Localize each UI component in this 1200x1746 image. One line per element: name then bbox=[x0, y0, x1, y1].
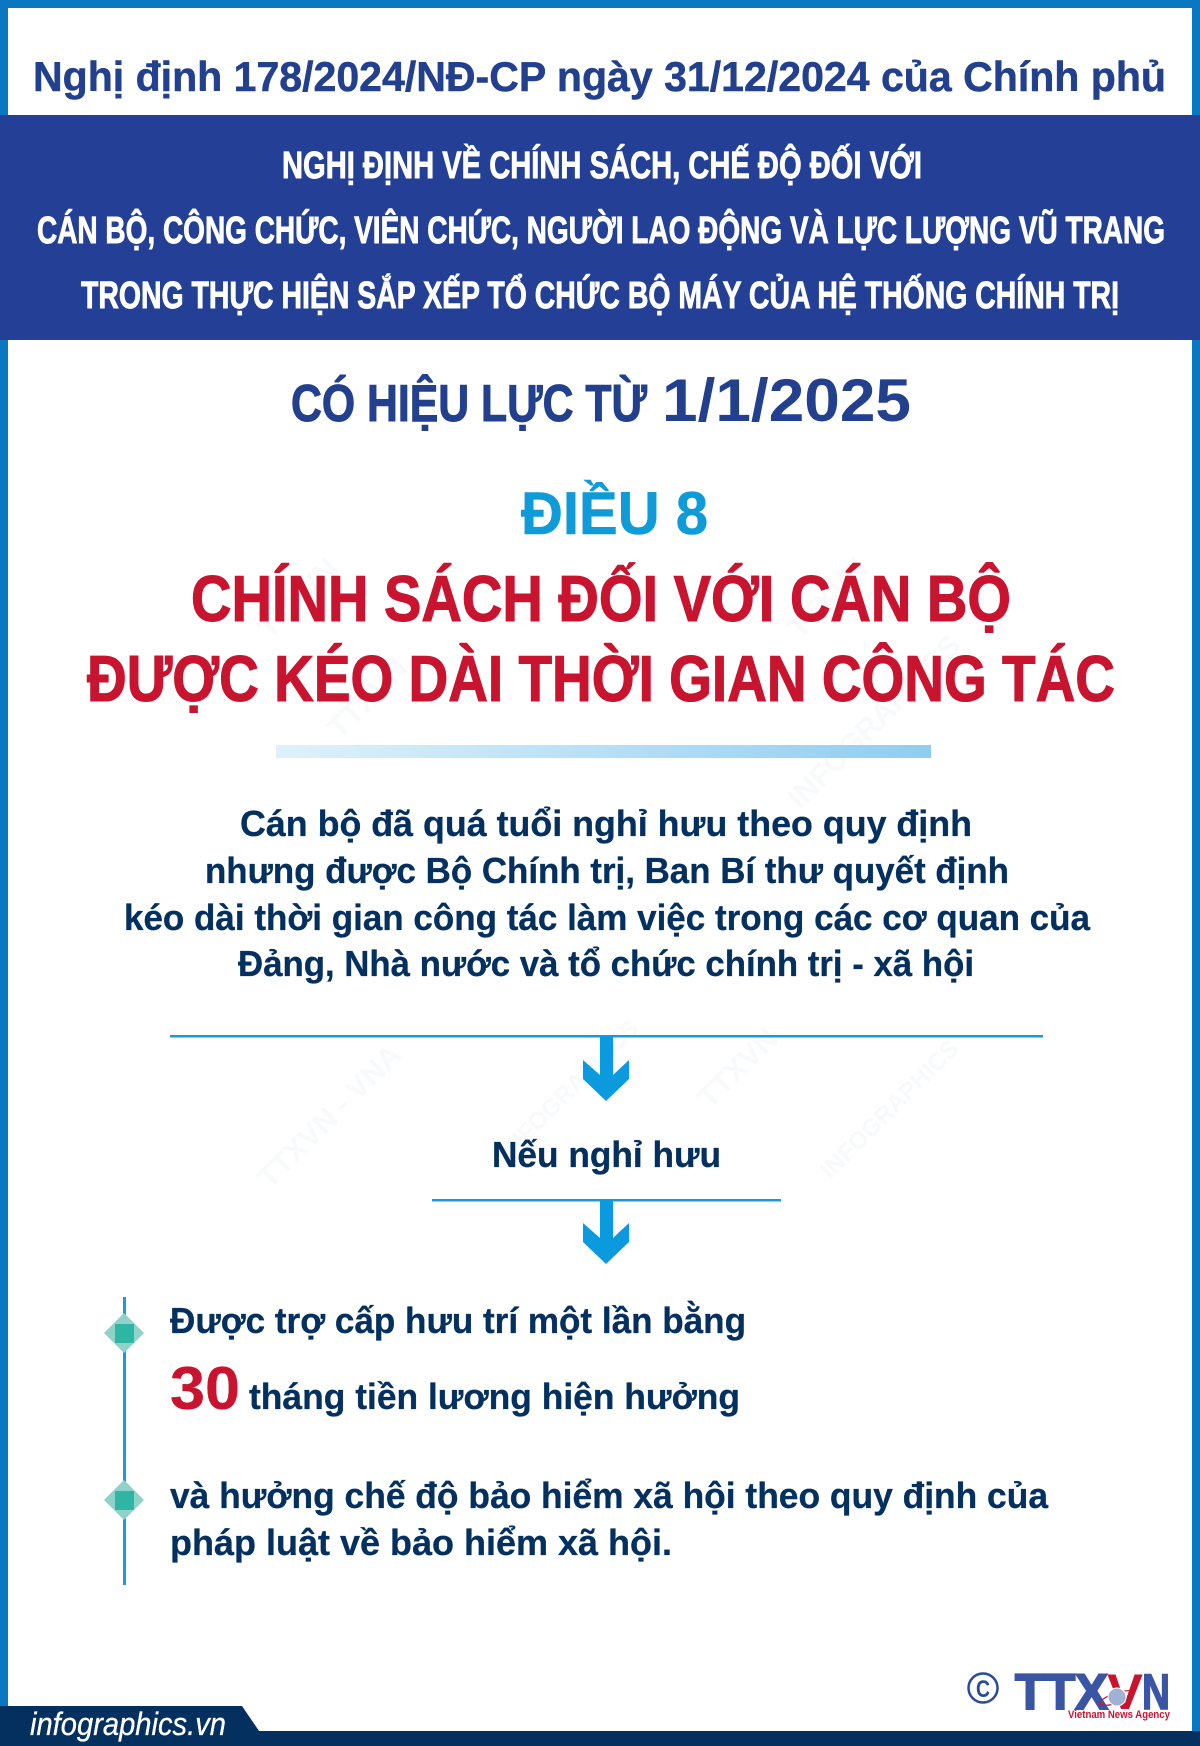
logo: TTXVN copyright: C bbox=[976, 1676, 990, 1703]
logo: TTXVN copyright: TTX bbox=[1015, 1664, 1108, 1720]
icon: diamond bullet two bbox=[104, 1480, 144, 1520]
intro paragraph: Đảng, Nhà nước và tổ chức chính trị - xã hội bbox=[238, 943, 974, 984]
key number: 30 months: 30 bbox=[170, 1355, 240, 1422]
logo: TTXVN copyright: V bbox=[1107, 1664, 1144, 1720]
effective date bbox=[291, 367, 911, 434]
intro paragraph bbox=[124, 803, 1091, 984]
benefit one text: tháng tiền lương hiện hưởng bbox=[249, 1376, 740, 1417]
benefits timeline bbox=[104, 1297, 144, 1585]
effective date: CÓ HIỆU LỰC TỪ bbox=[291, 374, 648, 433]
watermarks: TTXVN bbox=[252, 552, 344, 645]
watermarks: INFOGRAPHICS bbox=[495, 1015, 644, 1164]
logo: TTXVN copyright: Vietnam News Agency bbox=[1068, 1709, 1171, 1721]
icon: diamond bullet one bbox=[104, 1313, 144, 1353]
benefit two text: pháp luật về bảo hiểm xã hội. bbox=[170, 1522, 672, 1563]
panel: decree name banner: NGHỊ ĐỊNH VỀ CHÍNH SÁCH, CHẾ ĐỘ ĐỐI VỚI bbox=[282, 142, 922, 187]
benefit one text bbox=[170, 1299, 746, 1422]
watermarks: TTXVN bbox=[782, 552, 874, 645]
benefit two text: và hưởng chế độ bảo hiểm xã hội theo quy định của bbox=[170, 1475, 1049, 1516]
arrow: from condition to benefits bbox=[432, 1199, 781, 1264]
logo: TTXVN copyright: N bbox=[1142, 1664, 1170, 1720]
benefit two text bbox=[170, 1475, 1049, 1563]
watermarks: INFOGRAPHICS bbox=[782, 629, 968, 815]
watermarks: TTXVN bbox=[692, 1022, 784, 1115]
arrow: from paragraph to condition bbox=[170, 1035, 1043, 1101]
watermarks: TTXVN - VNA bbox=[252, 1038, 408, 1195]
benefit one text: Được trợ cấp hưu trí một lần bằng bbox=[170, 1299, 746, 1341]
article heading: CHÍNH SÁCH ĐỐI VỚI CÁN BỘ bbox=[191, 562, 1011, 635]
article number: ĐIỀU 8 bbox=[521, 480, 708, 547]
article heading bbox=[87, 562, 1115, 715]
intro paragraph: Cán bộ đã quá tuổi nghỉ hưu theo quy định bbox=[240, 803, 972, 844]
footer bar with site name bbox=[0, 1706, 1200, 1746]
logo: TTXVN copyright bbox=[968, 1664, 1171, 1721]
title: decree reference: Nghị định 178/2024/NĐ-CP ngày 31/12/2024 của Chính phủ bbox=[33, 53, 1166, 100]
watermarks bbox=[252, 552, 968, 1195]
panel: decree name banner bbox=[0, 115, 1200, 340]
condition label: Nếu nghỉ hưu bbox=[492, 1134, 721, 1175]
intro paragraph: nhưng được Bộ Chính trị, Ban Bí thư quyết định bbox=[205, 850, 1009, 891]
watermarks: INFOGRAPHICS bbox=[815, 1035, 964, 1184]
watermarks: TTXVN bbox=[322, 652, 414, 745]
intro paragraph: kéo dài thời gian công tác làm việc trong các cơ quan của bbox=[124, 897, 1091, 938]
effective date: 1/1/2025 bbox=[662, 367, 911, 434]
gradient divider bar bbox=[276, 745, 931, 758]
footer bar with site name: infographics.vn bbox=[30, 1706, 226, 1742]
